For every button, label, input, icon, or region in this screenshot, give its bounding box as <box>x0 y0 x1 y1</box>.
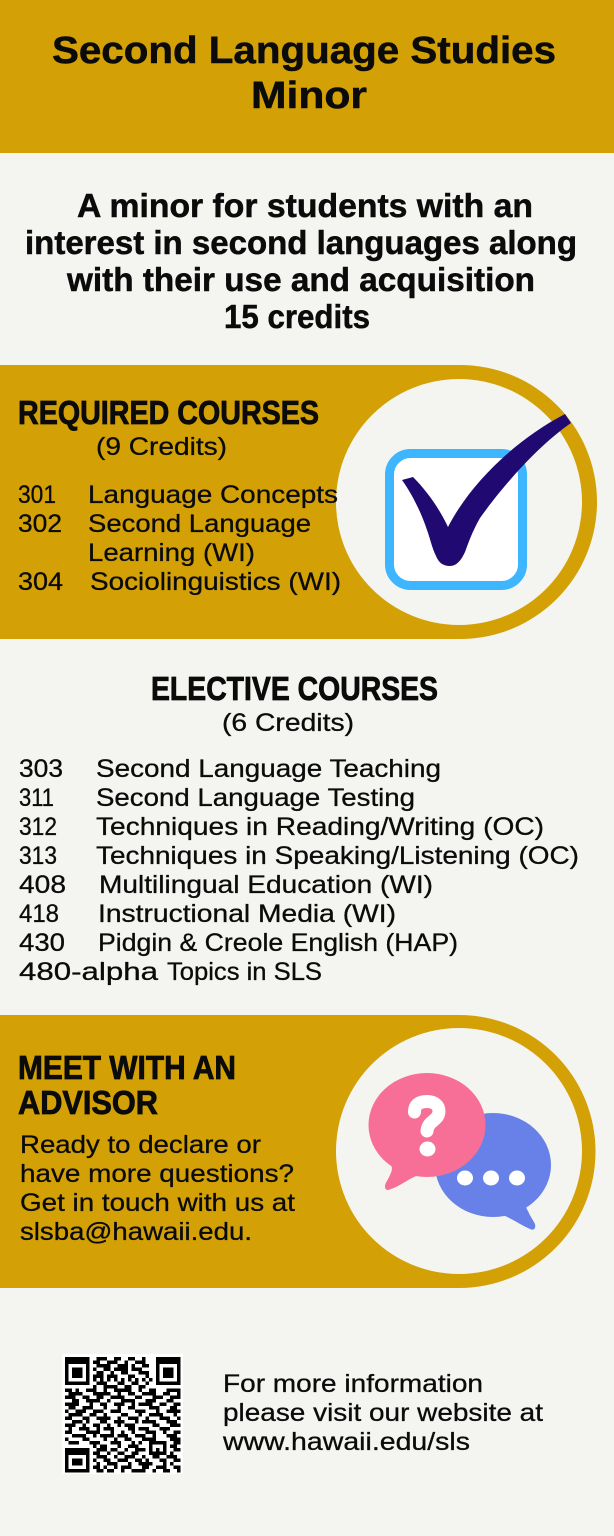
elective course list: 303 <box>19 755 63 783</box>
advisor contact text: Get in touch with us at <box>20 1189 295 1217</box>
title banner <box>0 0 614 153</box>
required course list: Sociolinguistics (WI) <box>90 568 341 596</box>
elective course list: Topics in SLS <box>167 958 322 986</box>
heading: required courses <box>18 394 319 461</box>
subtitle text block: with their use and acquisition <box>66 261 535 298</box>
elective course list: Techniques in Reading/Writing (OC) <box>96 813 544 841</box>
website information text: www.hawaii.edu/sls <box>222 1428 470 1456</box>
elective course list: 480-alpha <box>19 958 158 986</box>
elective course list: Pidgin & Creole English (HAP) <box>98 929 458 957</box>
elective course list: Second Language Teaching <box>96 755 441 783</box>
title: Minor <box>251 75 367 117</box>
heading: required courses: (9 Credits) <box>96 433 227 461</box>
required course list: Learning (WI) <box>88 539 255 567</box>
elective course list: Techniques in Speaking/Listening (OC) <box>96 842 579 870</box>
icon: checkbox with check mark <box>390 414 571 586</box>
elective course list: 408 <box>19 871 66 899</box>
required course list: 301 <box>18 481 56 509</box>
heading: elective courses <box>151 670 438 737</box>
elective course list: Second Language Testing <box>96 784 415 812</box>
panel: elective courses <box>19 670 579 986</box>
QR code <box>62 1354 183 1474</box>
panel: required courses <box>0 365 597 639</box>
heading: required courses: REQUIRED COURSES <box>18 394 319 431</box>
subtitle text block: A minor for students with an <box>77 187 533 224</box>
elective course list: 312 <box>19 813 57 841</box>
advisor contact text: Ready to declare or <box>20 1131 261 1159</box>
elective course list: 311 <box>19 784 54 812</box>
required course list: 304 <box>18 568 63 596</box>
required course list: 302 <box>18 510 62 538</box>
title: Second Language Studies <box>52 30 556 72</box>
advisor contact text: slsba@hawaii.edu. <box>20 1218 252 1246</box>
elective course list: Multilingual Education (WI) <box>99 871 433 899</box>
elective course list: 430 <box>19 929 65 957</box>
blue speech bubble <box>435 1113 551 1230</box>
website information text <box>222 1370 543 1456</box>
required course list: Language Concepts <box>88 481 338 509</box>
website information text: For more information <box>223 1370 483 1398</box>
elective course list <box>19 755 579 986</box>
heading: elective courses: ELECTIVE COURSES <box>151 670 438 707</box>
subtitle text block <box>25 187 577 335</box>
elective course list: 313 <box>19 842 57 870</box>
required course list: Second Language <box>88 510 311 538</box>
subtitle text block: 15 credits <box>224 298 370 335</box>
elective course list: Instructional Media (WI) <box>98 900 396 928</box>
subtitle text block: interest in second languages along <box>25 224 577 261</box>
advisor contact text: have more questions? <box>20 1160 294 1188</box>
title <box>52 30 556 117</box>
heading: meet with an advisor: MEET WITH AN <box>18 1049 236 1086</box>
elective course list: 418 <box>19 900 59 928</box>
website information text: please visit our website at <box>223 1399 543 1427</box>
heading: meet with an advisor <box>18 1049 236 1121</box>
advisor contact text <box>20 1131 295 1246</box>
heading: meet with an advisor: ADVISOR <box>18 1084 158 1121</box>
heading: elective courses: (6 Credits) <box>222 709 354 737</box>
panel: meet with an advisor <box>0 1015 596 1288</box>
required course list <box>18 481 341 596</box>
question mark <box>414 1102 439 1156</box>
icon: speech bubbles <box>368 1073 551 1230</box>
pink speech bubble <box>368 1073 486 1190</box>
